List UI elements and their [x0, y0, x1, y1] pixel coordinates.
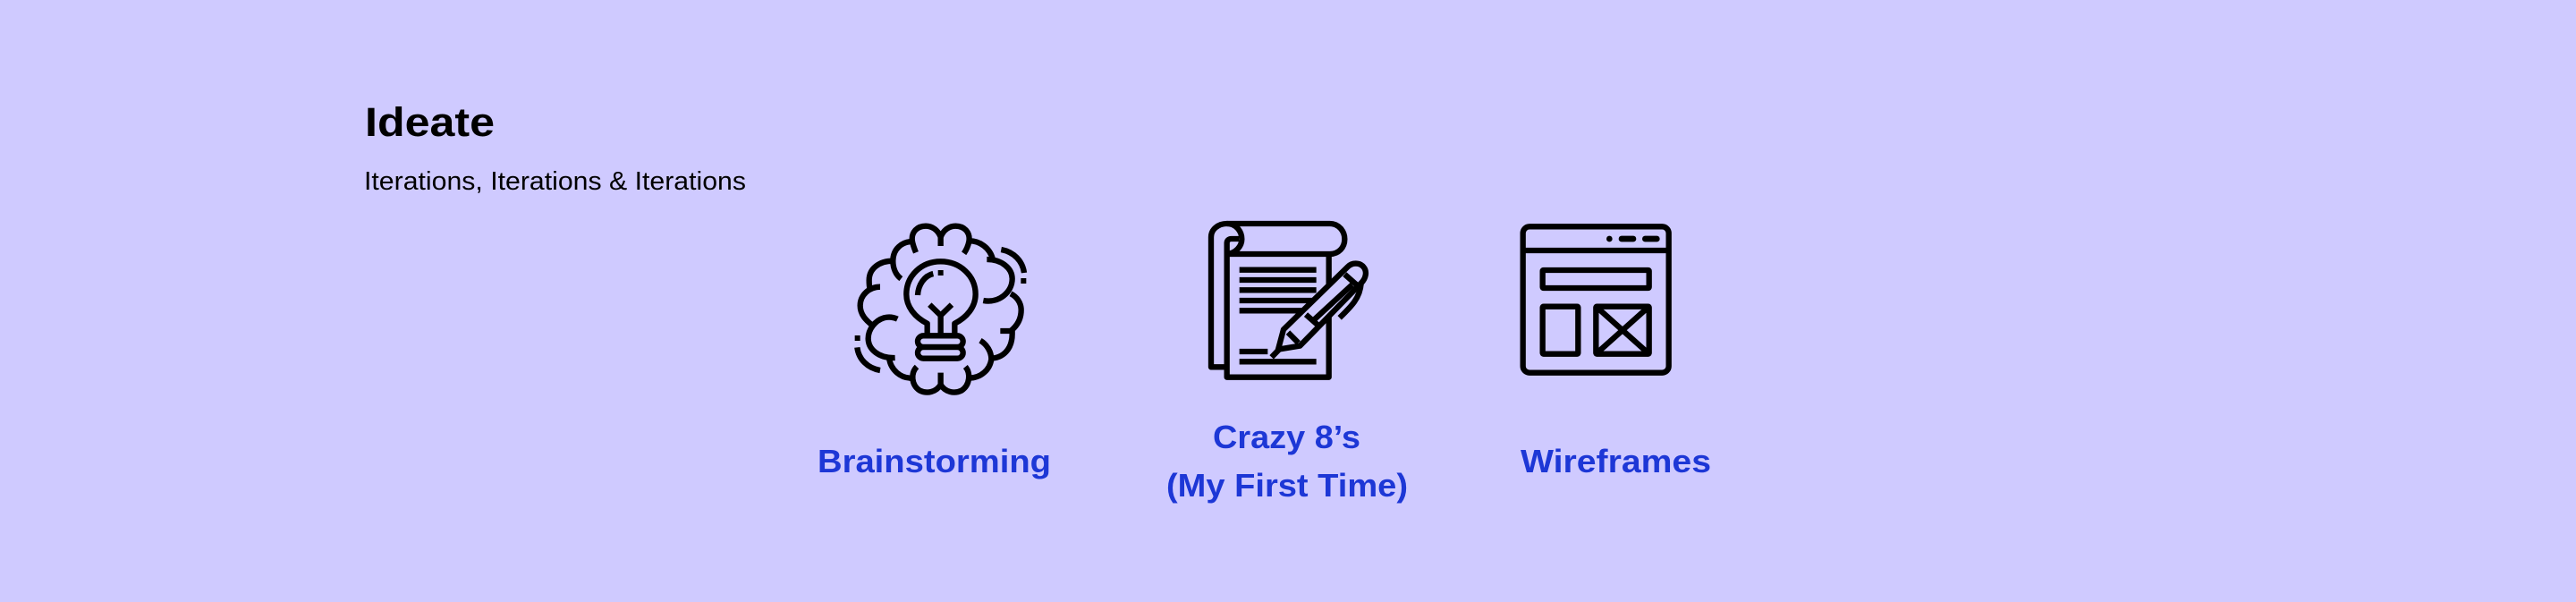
icon: wireframe browser window — [1523, 226, 1669, 373]
icon: notepad and pen — [1211, 224, 1366, 377]
icon: brain with light bulb — [855, 226, 1026, 393]
label: Crazy 8's (My First Time) — [1166, 419, 1408, 504]
label: Brainstorming: Brainstorming — [818, 443, 1051, 479]
label: Crazy 8's (My First Time): Crazy 8’s — [1213, 419, 1360, 455]
label: Wireframes: Wireframes — [1521, 443, 1711, 479]
subtitle: Iterations, Iterations & Iterations — [364, 167, 746, 196]
icon detail: pen — [1272, 264, 1366, 357]
label: Crazy 8's (My First Time): (My First Time) — [1166, 467, 1408, 504]
icon detail: bulb — [906, 261, 976, 359]
title: Ideate — [365, 99, 495, 145]
